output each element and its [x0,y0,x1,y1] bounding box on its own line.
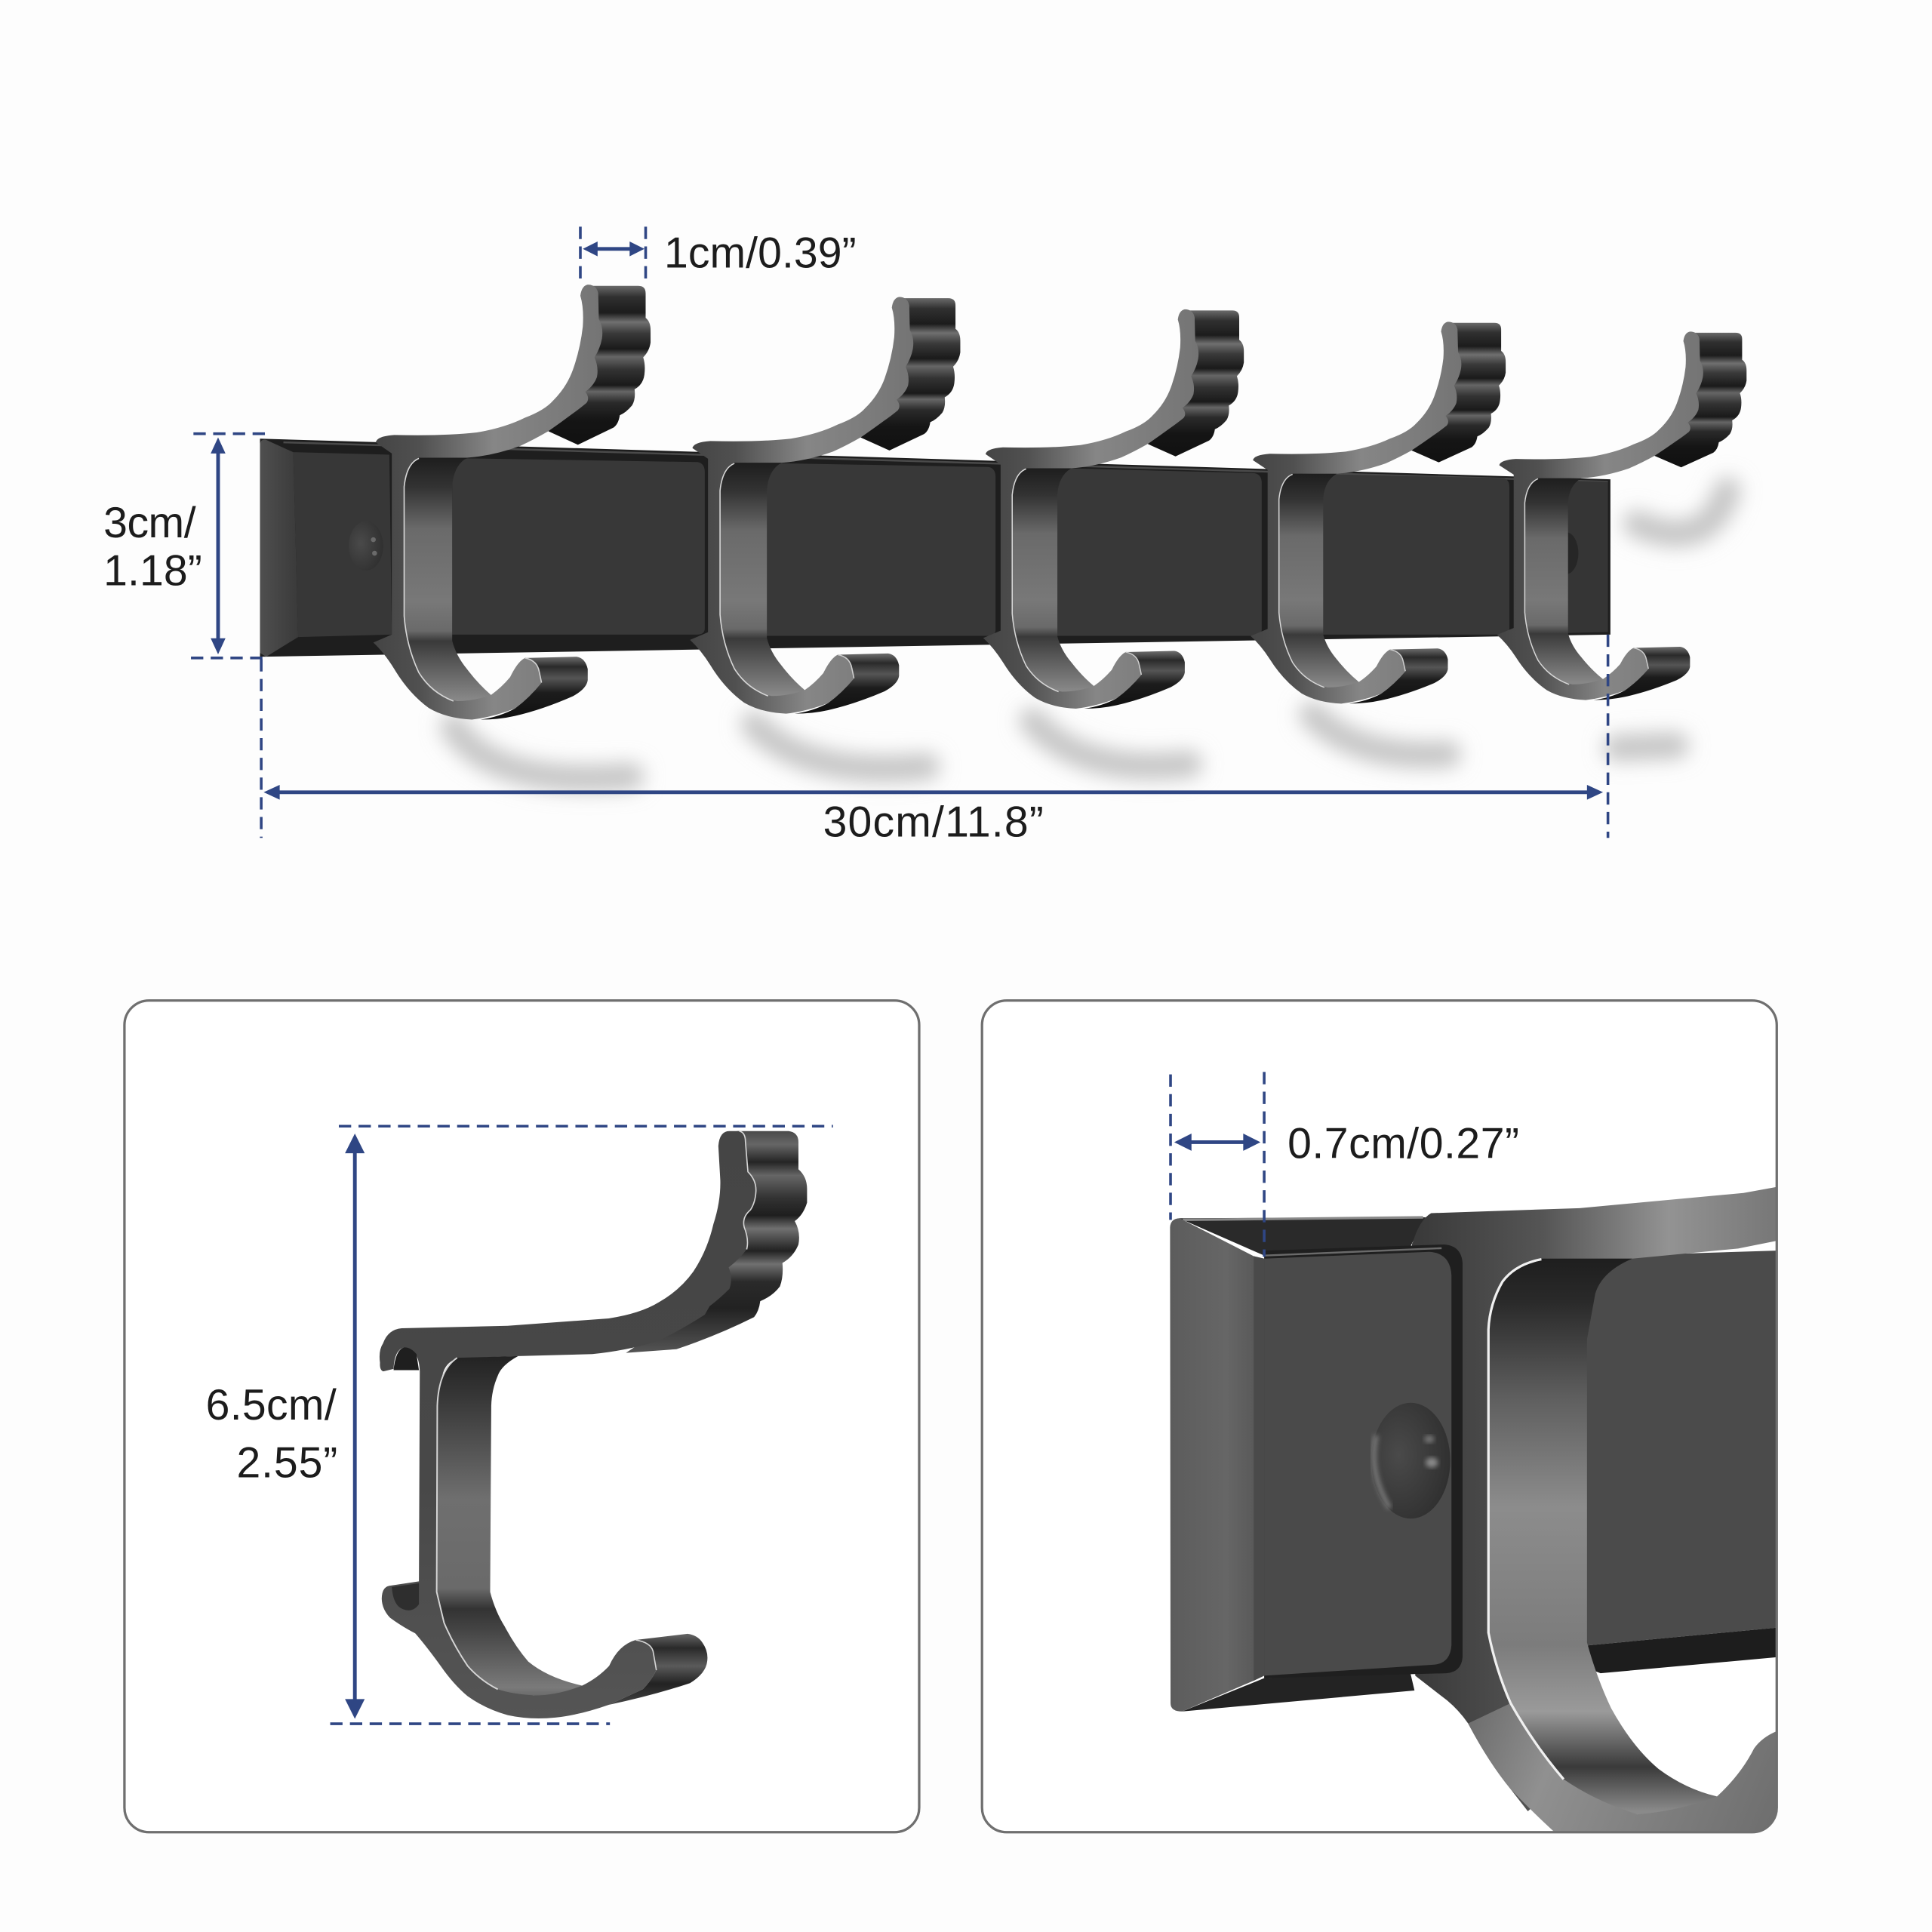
hook 2 [690,297,960,714]
hook lower body [1468,1703,1777,1836]
wall shadows of the hooks [454,491,1727,778]
front plate [1264,1244,1463,1678]
dimension: rail length [261,635,1608,847]
main rail plate [1540,1251,1777,1650]
dimension: hook height: 2.55” [236,1439,337,1487]
panel: single hook height [125,1001,919,1832]
bottom bevel [1183,1669,1414,1712]
dimension: hook tip width: 1cm/0.39” [664,229,857,277]
dimension: plate depth [1171,1072,1519,1257]
dimension: rail height [103,434,265,658]
close-up of rail and hook [1170,1187,1777,1836]
rail segment 2 [767,463,995,635]
hook inner band [1488,1259,1717,1814]
rail segment 5 [1555,481,1608,633]
rail segment 1 [452,458,705,635]
dimension: hook tip width [580,226,857,286]
rail segment 4 [1316,475,1509,635]
hook 4 [1251,321,1506,703]
hook 3 [983,309,1244,709]
rail left end cap [260,440,298,657]
rail body [260,438,1611,657]
panel border [982,1001,1777,1832]
product: hook rail [260,285,1746,719]
dimension: rail length: 30cm/11.8” [823,798,1044,847]
hook 5 [1497,331,1746,700]
panel: end plate thickness [982,1001,1777,1836]
screw [1371,1403,1451,1518]
dimension: rail height: 3cm/ [103,499,196,547]
dimension: rail height: 1.18” [103,547,202,595]
rail end plate [294,452,392,637]
dimension: hook height: 6.5cm/ [206,1381,337,1429]
hook 1 [374,285,651,719]
icon: single hook [380,1131,807,1718]
left cap [1170,1218,1264,1712]
screw left [349,521,383,571]
rail segment 3 [1051,468,1262,635]
hook arm and body [1412,1187,1777,1811]
dimension: plate depth: 0.7cm/0.27” [1287,1120,1519,1168]
top bevel [1179,1217,1426,1256]
dimension: hook height [206,1126,833,1724]
screw right [1554,532,1578,574]
